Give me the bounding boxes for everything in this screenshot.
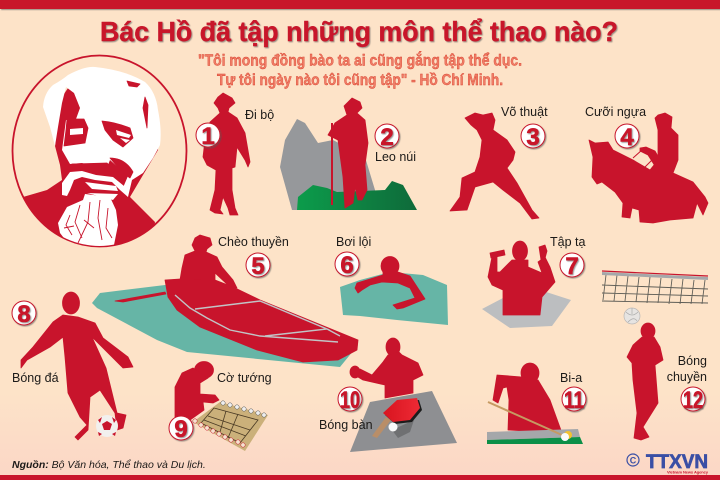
activity 1: walking — [203, 93, 274, 215]
badge 12: 12 — [683, 387, 703, 414]
activity 1: walking: Đi bộ — [245, 108, 274, 122]
badge 4: 4 — [620, 124, 634, 151]
badge 9 — [169, 416, 193, 443]
activity 6: swimming — [336, 235, 448, 325]
activity 12: volleyball: Bóng — [678, 354, 707, 368]
badge 2: 2 — [380, 124, 394, 151]
badge 7 — [560, 253, 584, 280]
TTXVN logo: Vietnam News Agency — [667, 470, 709, 474]
activity 2: mountain climbing — [280, 98, 417, 210]
TTXVN logo: C — [630, 456, 637, 466]
activity 8: football: Bóng đá — [12, 371, 59, 385]
activity 10: table tennis: Bóng bàn — [319, 418, 373, 432]
activity 10: table tennis — [319, 338, 457, 452]
badge 6: 6 — [340, 252, 354, 279]
activity 3: martial arts — [450, 105, 548, 219]
activity 9: Chinese chess — [175, 362, 272, 451]
quote: Tự tôi ngày nào tôi cũng tập" - Hồ Chí Minh. — [217, 72, 503, 89]
badge 2 — [375, 124, 399, 151]
activity 12: volleyball: chuyền — [667, 370, 707, 384]
activity 5: rowing — [92, 235, 358, 367]
activity 7: weight lifting — [482, 235, 585, 328]
activity 4: horse riding: Cưỡi ngựa — [585, 105, 646, 119]
badge 5: 5 — [251, 253, 265, 280]
activity 6: swimming: Bơi lội — [336, 235, 371, 249]
badge 1 — [196, 123, 220, 150]
badge 5 — [246, 253, 270, 280]
activity 8: football — [12, 292, 133, 440]
source: Nguồn: Bộ Văn hóa, Thể thao và Du lịch. — [12, 459, 206, 471]
badge 3 — [521, 124, 545, 151]
badge 4 — [615, 124, 639, 151]
top bar — [0, 0, 720, 9]
activity 7: weight lifting: Tập tạ — [550, 235, 585, 249]
badge 3: 3 — [526, 124, 540, 151]
activity 2: mountain climbing: Leo núi — [375, 150, 416, 164]
badge 8: 8 — [17, 301, 31, 328]
activity 11: billiards — [487, 363, 583, 444]
activity 9: Chinese chess: Cờ tướng — [217, 371, 272, 385]
badge 8 — [12, 301, 36, 328]
badge 7: 7 — [565, 253, 579, 280]
bottom bar — [0, 475, 720, 480]
activity 4: horse riding — [585, 105, 708, 223]
badge 1: 1 — [201, 123, 215, 150]
badge 6 — [335, 252, 359, 279]
portrait of Hồ Chí Minh — [12, 56, 186, 260]
activity 11: billiards: Bi-a — [560, 371, 582, 385]
quote — [198, 52, 522, 89]
activity 3: martial arts: Võ thuật — [501, 105, 548, 119]
activity 5: rowing: Chèo thuyền — [218, 235, 289, 249]
badge 11: 11 — [564, 387, 584, 414]
TTXVN logo: TTXVN — [646, 451, 708, 473]
title: Bác Hồ đã tập những môn thể thao nào? — [100, 16, 618, 47]
badge 10: 10 — [340, 387, 360, 414]
badge 9: 9 — [174, 416, 188, 443]
activity 12: volleyball — [602, 271, 708, 440]
quote: "Tôi mong đồng bào ta ai cũng gắng tập thể dục. — [198, 52, 522, 70]
